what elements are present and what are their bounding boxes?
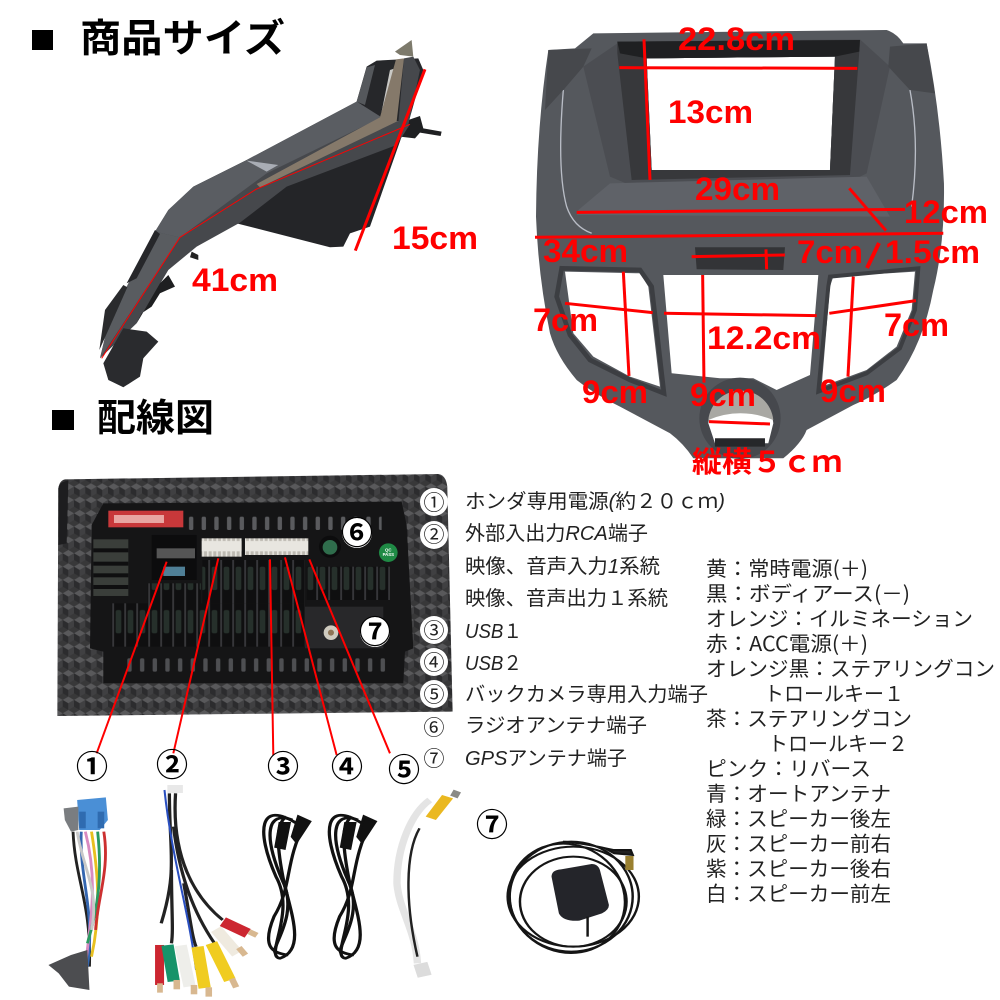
list of numbered ports: USB１: [465, 621, 522, 643]
list of numbered ports: ②: [424, 519, 444, 549]
cable numbers: [76, 740, 508, 846]
list of numbered ports: ④: [424, 647, 444, 677]
wire colour legend: ピンク：リバース: [706, 752, 871, 782]
side profile photo of frame: [99, 40, 442, 387]
dimension label: 13cm: 13cm: [668, 94, 753, 130]
callout: port 7 marker: ⑦: [359, 607, 391, 653]
wire colour legend: 紫：スピーカー後右: [706, 852, 891, 882]
list of numbered ports: ①: [424, 487, 444, 517]
list of numbered ports: GPSアンテナ端子: [465, 747, 627, 770]
dimension label: 29cm: 29cm: [695, 171, 780, 207]
list of numbered ports: 外部入出力RCA端子: [465, 522, 648, 545]
photo: USB cable ③: [264, 815, 310, 958]
dimension label: 34cm: 34cm: [543, 233, 628, 269]
wire colour legend: オレンジ：イルミネーション: [706, 602, 973, 632]
heading: wiring diagram: 配線図: [97, 387, 214, 442]
photo: power harness ①: [48, 797, 108, 990]
dimension label: 15cm: 15cm: [392, 220, 478, 256]
dimension label: 22.8cm: 22.8cm: [678, 21, 795, 57]
photo: USB cable ④: [329, 815, 375, 958]
list of numbered ports: USB２: [465, 653, 522, 675]
list of numbered ports: ③: [424, 615, 444, 645]
cable numbers: ⑤: [388, 745, 420, 791]
wire colour legend: トロールキー２: [768, 727, 908, 757]
wire colour legend: 赤：ACC電源(＋): [706, 627, 868, 657]
cable numbers: ②: [156, 740, 188, 786]
wire colour legend: 黄：常時電源(＋): [706, 552, 868, 582]
title: product size: 商品サイズ: [80, 8, 285, 64]
list of numbered ports: 映像、音声入力1系統: [465, 555, 660, 578]
wire colour legend: オレンジ黒：ステアリングコン: [706, 652, 995, 682]
dimension label: 9cm right: 9cm: [820, 373, 886, 409]
list of numbered ports: ⑤: [424, 679, 444, 709]
dimension label: 7cm/1.5cm: 1.5cm: [885, 234, 980, 270]
head unit rear photo with leader lines: [57, 474, 453, 755]
cable numbers: ③: [267, 742, 299, 788]
list of numbered ports: ラジオアンテナ端子: [465, 714, 647, 737]
wire colour legend: 青：オートアンテナ: [706, 777, 891, 807]
dimension label: 41cm: 41cm: [192, 262, 278, 298]
photo: GPS antenna ⑦: [497, 835, 639, 962]
photo: reverse camera cable ⑤: [397, 790, 461, 978]
callout: port 6 marker: ⑥: [341, 508, 373, 554]
wire colour legend: [706, 552, 995, 907]
head unit rear photo with leader lines: PASS: [383, 552, 394, 557]
dimension label: 12cm: 12cm: [904, 194, 988, 230]
wire colour legend: 黒：ボディアース(－): [706, 577, 910, 607]
front photo of dash frame with dimensions: [535, 30, 944, 459]
dimension label: 5cm square: 縦横５ｃｍ: [692, 439, 842, 481]
dimension label: 12.2cm: 12.2cm: [707, 320, 821, 356]
photo: RCA cable ②: [155, 785, 259, 997]
wire colour legend: 茶：ステアリングコン: [706, 702, 912, 732]
cable numbers: ④: [331, 742, 363, 788]
wire colour legend: 灰：スピーカー前右: [706, 827, 891, 857]
dimension label: 9cm centre: 9cm: [690, 377, 756, 413]
list of numbered ports: バックカメラ専用入力端子: [465, 683, 708, 706]
wire colour legend: トロールキー１: [764, 677, 904, 707]
dimension label: 7cm/1.5cm: [797, 234, 980, 270]
head unit rear photo with leader lines: QC: [385, 547, 392, 552]
wire colour legend: 緑：スピーカー後左: [706, 802, 891, 832]
list of numbered ports: ホンダ専用電源(約２０ｃｍ): [465, 490, 725, 513]
list of numbered ports: ⑥: [424, 712, 444, 742]
list of numbered ports: [420, 487, 725, 773]
list of numbered ports: 映像、音声出力１系統: [465, 587, 668, 610]
dimension label: 7cm right: 7cm: [884, 307, 949, 343]
list of numbered ports: ⑦: [424, 743, 444, 773]
cable numbers: ①: [76, 742, 108, 788]
dimension label: 7cm/1.5cm: 7cm: [797, 234, 863, 270]
wire colour legend: 白：スピーカー前左: [706, 877, 891, 907]
dimension label: 9cm left: 9cm: [582, 374, 648, 410]
cable numbers: ⑦: [476, 800, 508, 846]
dimension label: 7cm left: 7cm: [533, 302, 598, 338]
